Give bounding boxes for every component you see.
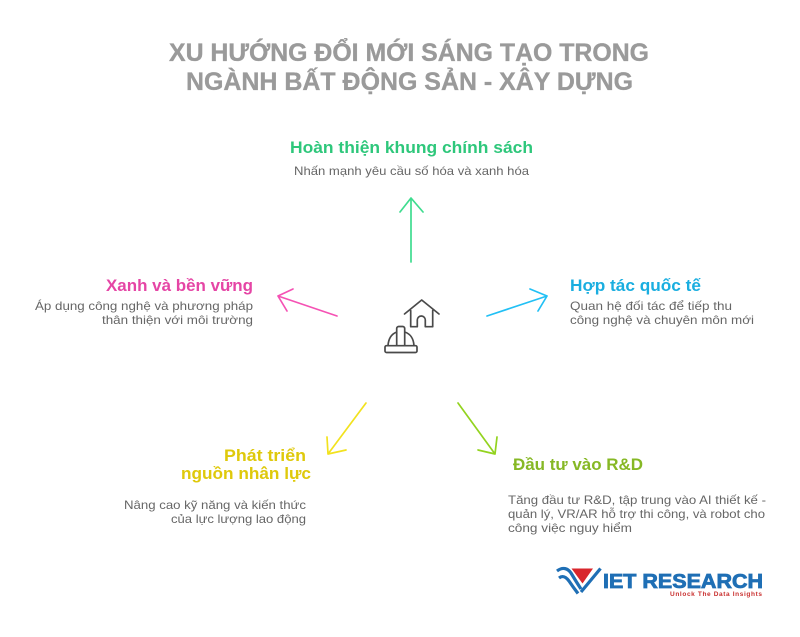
text block: workforce description	[124, 498, 306, 526]
text block: cooperation description: Quan hệ đối tác để tiếp thu	[570, 299, 732, 313]
logo tagline: Unlock The Data Insights	[670, 591, 762, 598]
panel: Hoàn thiện khung chính sách	[290, 139, 533, 178]
panel: Hợp tác quốc tế	[570, 277, 754, 327]
icon: house	[404, 300, 439, 327]
icon: house and hard hat	[385, 300, 439, 352]
heading: Phát triển nguồn nhân lực	[181, 447, 311, 483]
text block: R&D description: Tăng đầu tư R&D, tập trung vào AI thiết kế -	[508, 493, 766, 507]
title: XU HƯỚNG ĐỔI MỚI SÁNG TẠO TRONG	[169, 37, 649, 67]
arrow: right blue	[487, 289, 547, 316]
heading: Hoàn thiện khung chính sách: Hoàn thiện khung chính sách	[290, 139, 533, 157]
text block: green description: thân thiện với môi trường	[102, 313, 253, 327]
text block: workforce description: Nâng cao kỹ năng và kiến thức	[124, 498, 306, 512]
arrow: lower right olive	[458, 403, 497, 454]
icon: logo mark	[557, 568, 600, 594]
logo: Viet Research	[557, 568, 763, 598]
arrow: left pink	[278, 289, 337, 316]
text block: cooperation description: công nghệ và chuyên môn mới	[570, 313, 754, 327]
text block: R&D description: công việc nguy hiểm	[508, 521, 632, 535]
text block: green description: Áp dụng công nghệ và phương pháp	[35, 298, 253, 313]
panel: Xanh và bền vững	[35, 277, 253, 327]
text block: cooperation description	[570, 299, 754, 327]
text block: green description	[35, 298, 253, 327]
panel: Đầu tư vào R&D	[508, 456, 766, 535]
text block: workforce description: của lực lượng lao động	[171, 512, 306, 526]
heading: Đầu tư vào R&D: Đầu tư vào R&D	[513, 456, 643, 474]
arrow: up green	[400, 198, 423, 262]
arrow: lower left yellow	[327, 403, 366, 454]
title: NGÀNH BẤT ĐỘNG SẢN - XÂY DỰNG	[186, 66, 633, 96]
heading: Phát triển nguồn nhân lực: nguồn nhân lực	[181, 465, 311, 483]
panel: Phát triển nguồn nhân lực	[124, 447, 311, 526]
icon: hard hat	[385, 326, 417, 352]
title	[169, 37, 649, 96]
heading: Xanh và bền vững: Xanh và bền vững	[106, 277, 253, 295]
heading: Hợp tác quốc tế: Hợp tác quốc tế	[570, 277, 702, 295]
logo wordmark: IET RESEARCH	[603, 571, 763, 593]
heading: Phát triển nguồn nhân lực: Phát triển	[224, 447, 306, 465]
text block: policy description: Nhấn mạnh yêu cầu số hóa và xanh hóa	[294, 164, 529, 178]
text block: R&D description: quản lý, VR/AR hỗ trợ thi công, và robot cho	[508, 506, 765, 521]
text block: R&D description	[508, 493, 766, 535]
